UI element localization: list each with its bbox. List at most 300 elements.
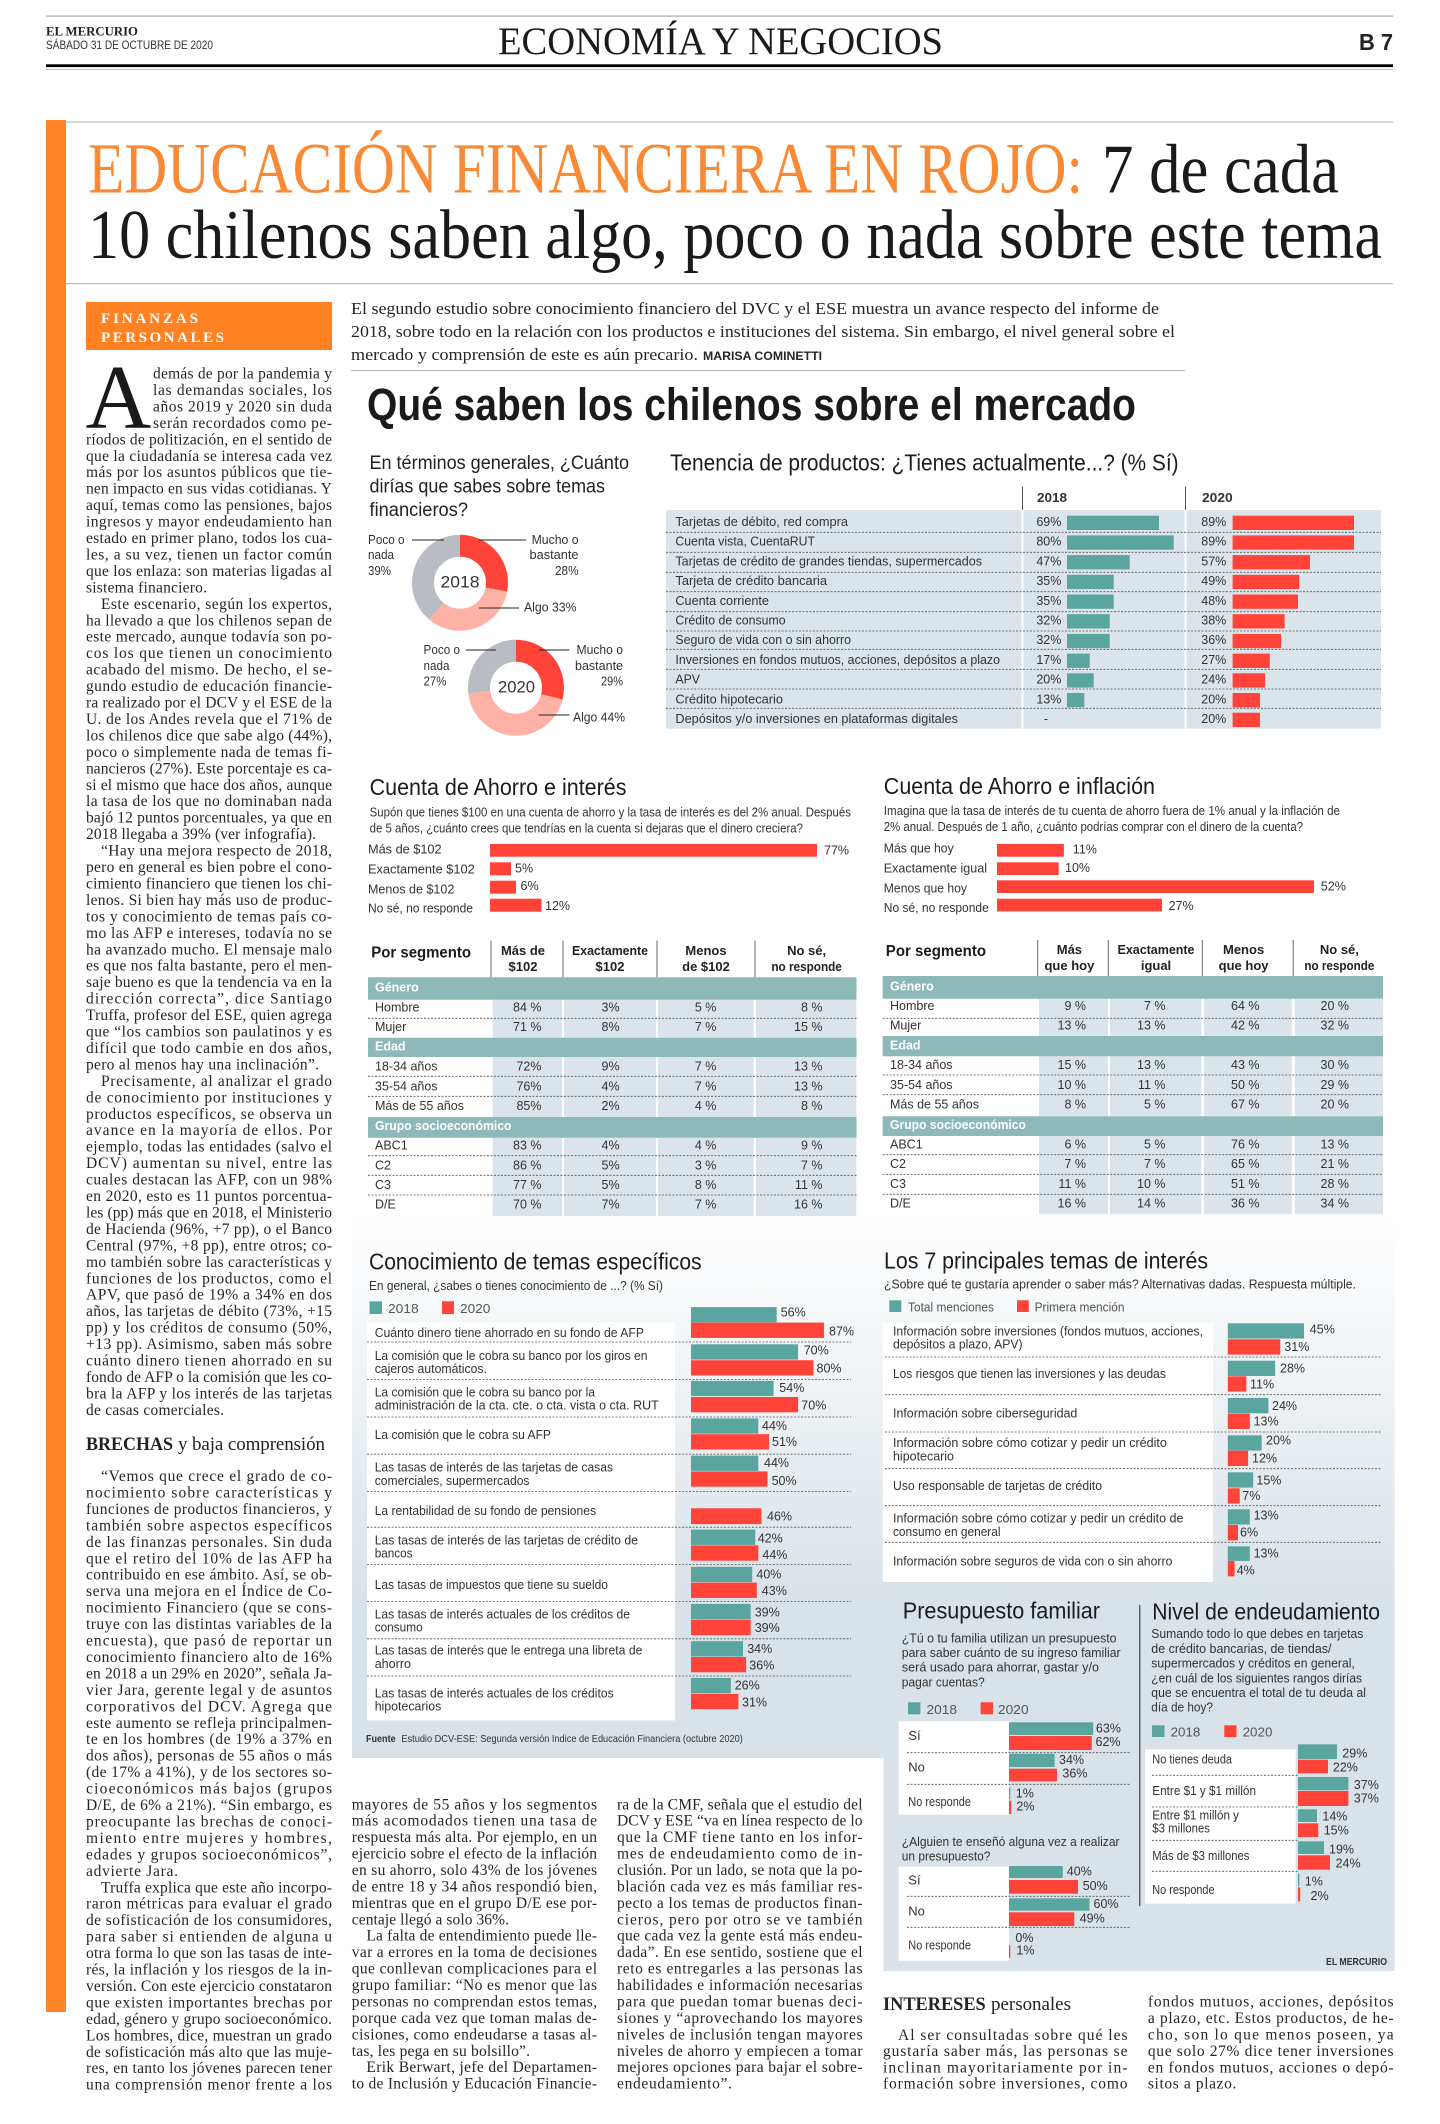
bars primera mención bbox=[1228, 1339, 1280, 1576]
table: por segmento, interés: 3% bbox=[602, 1000, 620, 1014]
article column 2: tas, les pega en su bolsillo”. bbox=[352, 2043, 530, 2060]
article column 1: productos específicos, se observa un bbox=[86, 1106, 332, 1123]
article column 2: var a errores en la toma de decisiones bbox=[352, 1944, 597, 1961]
article column 1: 2018 llegaba a 39% (ver infografía). bbox=[86, 826, 316, 843]
values: 35% bbox=[1036, 574, 1061, 588]
panel: conocimiento de temas específicos bbox=[366, 1248, 854, 1745]
donut question heading: dirías que sabes sobre temas bbox=[370, 477, 605, 498]
donut chart 2020: Mucho o bbox=[576, 642, 623, 657]
table: por segmento, interés: 7 % bbox=[695, 1060, 716, 1074]
values: 31% bbox=[1284, 1340, 1309, 1354]
values: 48% bbox=[1201, 594, 1226, 608]
article column 2: centaje llegó a solo 36%. bbox=[352, 1911, 509, 1928]
question 1: pagar cuentas? bbox=[902, 1674, 985, 1689]
table: por segmento, inflación: 13 % bbox=[1320, 1137, 1349, 1151]
values: 26% bbox=[735, 1679, 760, 1693]
question 1: ¿Tú o tu familia utilizan un presupuesto bbox=[902, 1630, 1116, 1645]
table: por segmento, interés: 11 % bbox=[795, 1178, 822, 1192]
row labels: Las tasas de interés de las tarjetas de crédito de bbox=[375, 1532, 638, 1547]
values: 20% bbox=[1201, 692, 1226, 706]
article column 1, continued: vier Jara, gerente legal y de asuntos bbox=[86, 1682, 332, 1699]
table: por segmento, interés: 7 % bbox=[695, 1079, 716, 1093]
table: por segmento, inflación: 65 % bbox=[1231, 1157, 1260, 1171]
article column 1: de casas comerciales. bbox=[86, 1402, 224, 1419]
article column 2: Erik Berwart, jefe del Departamen- bbox=[366, 2059, 597, 2076]
table: por segmento, interés: 4 % bbox=[695, 1099, 716, 1113]
source note: Fuente bbox=[366, 1733, 396, 1745]
article column 1, continued: una comprensión menor frente a los bbox=[86, 2077, 332, 2094]
article column 1, continued: serva una mejora en el Índice de Co- bbox=[86, 1583, 332, 1600]
question 1 bbox=[902, 1630, 1121, 1689]
table: por segmento, interés: de $102 bbox=[682, 959, 730, 974]
article column 1: sistema financiero. bbox=[86, 579, 207, 596]
table: por segmento, interés: 70 % bbox=[513, 1198, 542, 1212]
article column 1: U. de los Andes revela que el 71% de bbox=[86, 711, 332, 728]
article column 1: ingresos y mayor endeudamiento han bbox=[86, 514, 332, 531]
chart 2: 60% bbox=[1094, 1897, 1119, 1911]
donut chart 2018: 28% bbox=[555, 563, 579, 578]
article column 1: tos y conocimiento de temas país co- bbox=[86, 908, 332, 925]
article column 5: en fondos mutuos, acciones o depó- bbox=[1148, 2059, 1394, 2076]
values: 44% bbox=[762, 1419, 787, 1433]
article column 1 bbox=[86, 347, 333, 1419]
table: por segmento, inflación: 5 % bbox=[1144, 1098, 1166, 1112]
article column 5: fondos mutuos, acciones, depósitos bbox=[1148, 1994, 1394, 2011]
heading: Conocimiento de temas específicos bbox=[369, 1248, 702, 1274]
article column 3 bbox=[617, 1796, 863, 2093]
row labels: Información sobre ciberseguridad bbox=[893, 1405, 1077, 1420]
chart 1: 34% bbox=[1059, 1753, 1084, 1767]
article column 1, continued: preocupante las brechas de conoci- bbox=[86, 1814, 332, 1830]
legend: 2018 bbox=[926, 1702, 957, 1717]
article column 1, continued: de las finanzas personales. Sin duda bbox=[86, 1534, 332, 1551]
article column 1, continued bbox=[86, 1468, 333, 2094]
article column 4: inclinan mayoritariamente por in- bbox=[883, 2059, 1128, 2076]
subheading: brechas: BRECHAS bbox=[86, 1434, 173, 1455]
article column 3: reto es entregarles a las personas las bbox=[617, 1961, 862, 1978]
subheading: intereses personales bbox=[883, 1994, 1071, 2015]
chart 1 bbox=[898, 1721, 1130, 1815]
values: 49% bbox=[1201, 574, 1226, 588]
values: 51% bbox=[772, 1435, 797, 1449]
table: por segmento, inflación: C2 bbox=[890, 1157, 906, 1171]
table: por segmento, inflación: Por segmento bbox=[886, 943, 986, 960]
article column 2: ejercicio sobre el efecto de la inflación bbox=[352, 1846, 597, 1863]
table: por segmento, interés: Exactamente bbox=[572, 943, 648, 958]
article column 1, continued: dos años), personas de 55 años o más bbox=[86, 1748, 332, 1765]
article column 3: blación cada vez es más familiar res- bbox=[617, 1878, 862, 1896]
values: 45% bbox=[1310, 1323, 1335, 1337]
table: por segmento, inflación: 42 % bbox=[1231, 1019, 1260, 1033]
chart: Más de $3 millones bbox=[1152, 1848, 1250, 1863]
table: por segmento, inflación: 7 % bbox=[1144, 999, 1166, 1013]
bars 2020 bbox=[691, 1323, 824, 1709]
row labels: Crédito de consumo bbox=[675, 612, 786, 628]
article column 1: nen impacto en sus vidas cotidianas. Y bbox=[86, 481, 332, 498]
page header: EL MERCURIO bbox=[46, 25, 138, 39]
bar chart bbox=[368, 841, 849, 916]
question: ¿en cuál de los siguientes rangos dirías bbox=[1151, 1670, 1362, 1685]
intro text: 2018, sobre todo en la relación con los productos e instituciones del sistema. Sin embargo, el nivel general sobre el bbox=[351, 322, 1175, 341]
values: 46% bbox=[767, 1509, 792, 1523]
donut chart 2018 bbox=[368, 532, 579, 620]
values: 50% bbox=[772, 1474, 797, 1488]
heading: Los 7 principales temas de interés bbox=[884, 1247, 1208, 1273]
question 2: un presupuesto? bbox=[902, 1849, 990, 1864]
article column 1: cimiento financiero que tienen los chi- bbox=[86, 876, 332, 892]
article column 1, continued: este aumento se refleja principalmen- bbox=[86, 1715, 332, 1732]
bar chart: 11% bbox=[1073, 842, 1097, 856]
article column 1: si el mismo que hace dos años, aunque bbox=[86, 777, 332, 794]
donut chart 2020: 29% bbox=[601, 674, 623, 689]
table: por segmento, inflación: 6 % bbox=[1064, 1137, 1086, 1151]
article column 1: serán recordados como pe- bbox=[153, 415, 332, 432]
page header: B 7 bbox=[1359, 29, 1393, 55]
table: por segmento, inflación: No sé, bbox=[1320, 942, 1359, 957]
panel: cuenta de ahorro e interés: Supón que tienes $100 en una cuenta de ahorro y la tasa de interés es del 2% anual. Después bbox=[370, 805, 851, 820]
values: 27% bbox=[1201, 653, 1226, 667]
article column 1, continued: que el retiro del 10% de las AFP ha bbox=[86, 1550, 332, 1567]
values: 44% bbox=[762, 1548, 787, 1562]
row labels: cajeros automáticos. bbox=[375, 1361, 487, 1376]
table: por segmento, interés: C2 bbox=[375, 1158, 391, 1172]
article column 1: cos los que tienen un conocimiento bbox=[86, 645, 332, 662]
table: por segmento, inflación: no responde bbox=[1304, 958, 1374, 973]
article column 1, continued: corporativos del DCV. Agrega que bbox=[86, 1698, 332, 1715]
chart 1: 2% bbox=[1016, 1800, 1034, 1814]
table: por segmento, inflación: 14 % bbox=[1137, 1197, 1166, 1211]
article column 1, continued: “Vemos que crece el grado de co- bbox=[101, 1468, 332, 1485]
bar chart: Más de $102 bbox=[368, 841, 442, 856]
article column 2: en su ahorro, solo 43% de los jóvenes bbox=[352, 1862, 597, 1879]
article column 1: ejemplo, todas las entidades (salvo el bbox=[86, 1139, 332, 1156]
chart: 2% bbox=[1310, 1889, 1329, 1903]
table: por segmento, interés: 4% bbox=[602, 1139, 620, 1153]
article column 2: más acomodados tienen una tasa de bbox=[352, 1813, 597, 1830]
bars 2018 bbox=[1067, 516, 1174, 707]
table: por segmento, interés: C3 bbox=[375, 1178, 391, 1192]
heading: Cuenta de Ahorro e inflación bbox=[884, 773, 1155, 799]
row labels: bancos bbox=[375, 1546, 413, 1560]
article column 1, continued: D/E, de 6% a 21%). “Sin embargo, es bbox=[86, 1797, 332, 1814]
table: por segmento, interés: 5% bbox=[602, 1158, 620, 1172]
row labels bbox=[675, 514, 1000, 726]
row labels: Información sobre cómo cotizar y pedir un crédito de bbox=[893, 1511, 1183, 1526]
bar chart: Menos que hoy bbox=[884, 880, 967, 895]
article column 1: de conocimiento por instituciones y bbox=[86, 1089, 332, 1106]
values: 24% bbox=[1272, 1399, 1297, 1413]
article column 1, continued: (de 17% a 41%), y de los sectores so- bbox=[86, 1764, 332, 1781]
legend bbox=[370, 1301, 490, 1316]
article column 1: aquí, temas como las pensiones, bajos bbox=[86, 497, 332, 514]
table: por segmento, interés: no responde bbox=[771, 959, 842, 974]
section tag: finanzas personales: PERSONALES bbox=[101, 330, 224, 346]
bar chart bbox=[884, 841, 1346, 915]
question 2 bbox=[902, 1834, 1120, 1864]
article column 1, continued: cioeconómicos más bajos (grupos bbox=[86, 1781, 332, 1798]
values: 15% bbox=[1256, 1474, 1281, 1488]
question: día de hoy? bbox=[1151, 1700, 1213, 1715]
table: por segmento, inflación: 10 % bbox=[1058, 1078, 1086, 1092]
article column 1, continued: funciones de productos financieros, y bbox=[86, 1501, 332, 1518]
row labels: hipotecarios bbox=[375, 1698, 442, 1713]
chart: 22% bbox=[1333, 1761, 1358, 1775]
bar chart: Exactamente igual bbox=[884, 861, 987, 876]
chart 1: 36% bbox=[1062, 1767, 1087, 1781]
values: 6% bbox=[1240, 1526, 1258, 1540]
question 1: será usado para ahorrar, gastar y/o bbox=[902, 1660, 1099, 1675]
table: por segmento, inflación: 36 % bbox=[1231, 1197, 1260, 1211]
article column 1, continued: Truffa explica que este año incorpo- bbox=[101, 1879, 332, 1896]
values: 35% bbox=[1036, 594, 1061, 608]
article column 3: dada”. En ese sentido, sostiene que el bbox=[617, 1944, 862, 1961]
table: por segmento, interés: 8% bbox=[602, 1020, 620, 1034]
article column 1: ha llevado a que los chilenos sepan de bbox=[86, 612, 332, 629]
values: 54% bbox=[779, 1381, 804, 1395]
article column 1: cuánto dinero tienen ahorrado en su bbox=[86, 1352, 332, 1370]
row labels: Crédito hipotecario bbox=[675, 691, 783, 706]
table: por segmento, inflación: 7 % bbox=[1064, 1157, 1086, 1171]
question: de crédito bancarias, de tiendas/ bbox=[1151, 1641, 1332, 1656]
article column 1: les, a su vez, tienen un factor común bbox=[86, 546, 332, 564]
table: por segmento, inflación: 20 % bbox=[1320, 1098, 1349, 1112]
article column 1: de Hacienda (96%, +7 pp), o el Banco bbox=[86, 1221, 332, 1238]
table: por segmento, interés: 9 % bbox=[801, 1139, 822, 1153]
article column 2 bbox=[352, 1796, 597, 2093]
values: 36% bbox=[1201, 633, 1226, 647]
table: por segmento, inflación: 32 % bbox=[1320, 1019, 1349, 1033]
article column 1: que “los cambios son paulatinos y es bbox=[86, 1024, 332, 1040]
article column 1, continued: conocimiento financiero alto de 16% bbox=[86, 1649, 332, 1666]
legend: 2020 bbox=[1243, 1725, 1272, 1740]
article column 3: ra de la CMF, señala que el estudio del bbox=[617, 1796, 862, 1813]
article column 3: que la CMF tiene tanto en los infor- bbox=[617, 1829, 862, 1846]
table: por segmento, inflación: igual bbox=[1141, 958, 1171, 973]
values: 4% bbox=[1237, 1563, 1255, 1577]
section tag: finanzas personales: FINANZAS bbox=[101, 311, 198, 327]
article column 1: mo también sobre las características y bbox=[86, 1254, 332, 1271]
article column 3: clusión. Por un lado, se nota que la po- bbox=[617, 1862, 862, 1879]
donut chart 2018: bastante bbox=[530, 547, 578, 562]
table: por segmento, inflación: 34 % bbox=[1320, 1197, 1349, 1211]
panel: cuenta de ahorro e interés: de 5 años, ¿cuánto crees que tendrías en la cuenta si dejaras que el dinero creciera? bbox=[370, 820, 803, 835]
bar chart: 10% bbox=[1065, 861, 1090, 875]
chart: No responde bbox=[1152, 1882, 1214, 1897]
table: por segmento, inflación: 13 % bbox=[1058, 1019, 1086, 1033]
article column 2: personas no comprendan estos temas, bbox=[352, 1994, 597, 2010]
table: por segmento, inflación: 67 % bbox=[1231, 1098, 1260, 1112]
article column 3: pecto a los temas de productos finan- bbox=[617, 1895, 862, 1912]
article column 1, continued: en 2018 a un 29% en 2020”, señala Ja- bbox=[86, 1665, 332, 1682]
row labels: Las tasas de interés actuales de los créditos de bbox=[375, 1606, 630, 1621]
table: por segmento, inflación: Grupo socioeconómico bbox=[890, 1118, 1026, 1132]
chart 2: No responde bbox=[908, 1938, 971, 1953]
article column 2: respuesta más alta. Por ejemplo, en un bbox=[352, 1829, 597, 1846]
values: 11% bbox=[1250, 1378, 1274, 1392]
article column 1: dirección correcta”, dice Santiago bbox=[86, 991, 332, 1008]
table: por segmento, inflación: 13 % bbox=[1137, 1058, 1166, 1072]
bar chart: 5% bbox=[515, 862, 533, 876]
article column 1, continued: raron métricas para evaluar el grado bbox=[86, 1896, 332, 1913]
bar chart: Exactamente $102 bbox=[368, 861, 475, 876]
row labels: Tarjetas de crédito de grandes tiendas, supermercados bbox=[675, 553, 982, 568]
article column 1, continued: res, en tanto los jóvenes parecen tener bbox=[86, 2060, 333, 2077]
chart 2: 1% bbox=[1016, 1944, 1034, 1958]
values: 70% bbox=[804, 1343, 829, 1357]
article column 1: años, las tarjetas de débito (73%, +15 bbox=[86, 1303, 332, 1320]
table: por segmento, interés: $102 bbox=[509, 959, 537, 974]
article column 5: sitos a plazo. bbox=[1148, 2076, 1236, 2093]
article column 1: la tasa de los que no dominaban nada bbox=[86, 793, 332, 810]
article column 1: funciones de los productos, como el bbox=[86, 1270, 332, 1287]
table: por segmento, interés bbox=[368, 941, 856, 1216]
table: por segmento, interés: 71 % bbox=[513, 1020, 542, 1034]
table: por segmento, interés: 84 % bbox=[513, 1000, 542, 1014]
article column 3: niveles de ahorro y empiecen a tomar bbox=[617, 2043, 863, 2060]
table: por segmento, interés: 7 % bbox=[695, 1198, 716, 1212]
subheading: brechas: y baja comprensión bbox=[178, 1434, 326, 1455]
article column 1: Truffa, profesor del ESE, quien agrega bbox=[86, 1007, 332, 1024]
article column 1: más por los asuntos públicos que tie- bbox=[86, 464, 332, 481]
bar chart: No sé, no responde bbox=[368, 901, 473, 916]
chart: Entre $1 y $1 millón bbox=[1152, 1783, 1256, 1798]
article column 1: Este escenario, según los expertos, bbox=[101, 596, 332, 613]
row labels bbox=[375, 1325, 659, 1713]
row labels: La comisión que le cobra su banco por la bbox=[375, 1384, 596, 1399]
article column 1, continued: de sofisticación de los consumidores, bbox=[86, 1912, 332, 1929]
main headline: 7 de cada bbox=[1102, 132, 1339, 209]
table: por segmento, interés: ABC1 bbox=[375, 1139, 408, 1153]
table: por segmento, interés: 5% bbox=[602, 1178, 620, 1192]
article column 4 bbox=[883, 2027, 1128, 2093]
values: 89% bbox=[1201, 535, 1226, 549]
row labels: consumo en general bbox=[893, 1524, 1001, 1539]
table: por segmento, inflación: 21 % bbox=[1320, 1157, 1349, 1171]
row labels: Los riesgos que tienen las inversiones y las deudas bbox=[893, 1366, 1166, 1381]
table: por segmento, inflación: 10 % bbox=[1137, 1177, 1166, 1191]
donut chart 2018: Poco o bbox=[368, 532, 404, 547]
article column 1, continued: nocimiento sobre características y bbox=[86, 1484, 332, 1502]
values: 40% bbox=[756, 1568, 781, 1582]
row labels: APV bbox=[675, 672, 700, 687]
article column 3: habilidades e información necesarias bbox=[617, 1977, 862, 1994]
article column 3: que cada vez la gente está más endeu- bbox=[617, 1928, 862, 1945]
article column 1, continued: Los hombres, dice, muestran un grado bbox=[86, 2027, 332, 2044]
article column 3: niveles de inclusión tengan mayores bbox=[617, 2026, 862, 2043]
table: por segmento, interés: Hombre bbox=[375, 1000, 420, 1014]
values: 42% bbox=[758, 1531, 783, 1545]
table: por segmento, interés: 9% bbox=[602, 1060, 620, 1074]
article column 1: años 2019 y 2020 sin duda bbox=[153, 398, 332, 415]
article column 4: formación sobre inversiones, como bbox=[883, 2076, 1128, 2093]
article column 1, continued: truye con las distintas variables de la bbox=[86, 1616, 332, 1633]
table: por segmento, interés: 7 % bbox=[695, 1020, 716, 1034]
question 1: para saber cuánto de su ingreso familiar bbox=[902, 1645, 1121, 1660]
table: por segmento, inflación bbox=[883, 940, 1383, 1214]
article column 5: cho, son lo que menos poseen, ya bbox=[1148, 2026, 1394, 2044]
table: por segmento, interés: 4% bbox=[602, 1079, 620, 1093]
table: por segmento, interés: 35-54 años bbox=[375, 1079, 438, 1093]
donut question heading: En términos generales, ¿Cuánto bbox=[370, 453, 629, 474]
chart 2: No bbox=[908, 1904, 925, 1919]
section tag: finanzas personales bbox=[86, 302, 332, 350]
heading: Presupuesto familiar bbox=[903, 1597, 1100, 1623]
row labels: comerciales, supermercados bbox=[375, 1473, 530, 1488]
chart: No tienes deuda bbox=[1152, 1751, 1233, 1766]
article column 1: es que nos falta bastante, pero el men- bbox=[86, 958, 332, 975]
intro text bbox=[351, 299, 1185, 371]
subheading: brechas bbox=[86, 1434, 326, 1455]
credit: EL MERCURIO bbox=[1326, 1956, 1387, 1968]
table: por segmento, inflación: Hombre bbox=[890, 999, 935, 1013]
table: por segmento, interés: D/E bbox=[375, 1198, 396, 1212]
article column 4: gustaría saber más, las personas se bbox=[883, 2043, 1128, 2060]
table: por segmento, inflación: que hoy bbox=[1044, 958, 1095, 973]
article column 3: para que puedan tomar buenas deci- bbox=[617, 1994, 862, 2010]
table: por segmento, inflación: 28 % bbox=[1320, 1177, 1349, 1191]
row labels: Las tasas de interés que le entrega una libreta de bbox=[375, 1643, 642, 1658]
table: por segmento, interés: 4 % bbox=[695, 1139, 716, 1153]
table: por segmento, inflación: 11 % bbox=[1058, 1177, 1086, 1191]
table: por segmento, interés: 16 % bbox=[794, 1198, 822, 1212]
donut chart 2020: 27% bbox=[424, 674, 447, 689]
panel: nivel de endeudamiento bbox=[1145, 1598, 1380, 1904]
subheading: intereses personales: INTERESES bbox=[883, 1994, 986, 2015]
row labels: Inversiones en fondos mutuos, acciones, depósitos a plazo bbox=[675, 652, 1000, 667]
donut chart 2018: Algo 33% bbox=[524, 600, 577, 615]
subheading: intereses personales: personales bbox=[991, 1994, 1071, 2015]
values: 24% bbox=[1201, 673, 1226, 687]
row labels: La comisión que le cobra su banco por los giros en bbox=[375, 1348, 648, 1363]
donut chart 2020: nada bbox=[424, 658, 450, 673]
main headline: EDUCACIÓN FINANCIERA EN ROJO: bbox=[88, 129, 1083, 209]
article column 1, continued: advierte Jara. bbox=[86, 1863, 178, 1880]
values: 32% bbox=[1036, 633, 1061, 647]
table: por segmento, interés: 3 % bbox=[695, 1158, 716, 1172]
table: por segmento, inflación: 30 % bbox=[1320, 1058, 1349, 1072]
vertical divider bbox=[1139, 1605, 1140, 1906]
table: por segmento, inflación: 7 % bbox=[1144, 1157, 1166, 1171]
table: por segmento, inflación: Género bbox=[890, 980, 934, 994]
row labels: Las tasas de interés actuales de los créditos bbox=[375, 1685, 614, 1700]
table: por segmento, interés: 8 % bbox=[695, 1178, 716, 1192]
question bbox=[1151, 1626, 1366, 1715]
table: por segmento, inflación: 16 % bbox=[1058, 1197, 1086, 1211]
table: por segmento, inflación: C3 bbox=[890, 1177, 906, 1191]
chart: 19% bbox=[1329, 1842, 1354, 1856]
table: por segmento, inflación: 13 % bbox=[1137, 1019, 1166, 1033]
row labels: depósitos a plazo, APV) bbox=[893, 1337, 1023, 1352]
article column 1, continued: para saber si entienden de alguna u bbox=[86, 1929, 332, 1946]
article column 1: APV, que pasó de 19% a 34% en dos bbox=[86, 1287, 332, 1304]
values: 20% bbox=[1036, 673, 1061, 687]
article column 1, continued: nocimiento Financiero (que se cons- bbox=[86, 1600, 332, 1617]
article column 1, continued: que existen importantes brechas por bbox=[86, 1994, 333, 2011]
row labels: hipotecario bbox=[893, 1448, 954, 1463]
article column 3: siones y “aprovechando los mayores bbox=[617, 2010, 862, 2027]
article column 1: +13 pp). Asimismo, saben más sobre bbox=[86, 1336, 332, 1353]
article column 3: endeudamiento”. bbox=[617, 2076, 732, 2093]
table: por segmento, inflación: 50 % bbox=[1231, 1078, 1260, 1092]
table: por segmento, interés: 77 % bbox=[513, 1178, 542, 1192]
table: por segmento, interés: 13 % bbox=[794, 1060, 822, 1074]
table: por segmento, interés: Edad bbox=[375, 1040, 406, 1054]
article column 1, continued: rés, la inflación y los riesgos de la in- bbox=[86, 1962, 332, 1978]
article column 1, continued: también sobre aspectos específicos bbox=[86, 1517, 332, 1534]
drop cap: A bbox=[86, 347, 152, 448]
article column 1: difícil que todo cambie en dos años, bbox=[86, 1040, 332, 1057]
row labels: Las tasas de interés de las tarjetas de casas bbox=[375, 1460, 613, 1475]
